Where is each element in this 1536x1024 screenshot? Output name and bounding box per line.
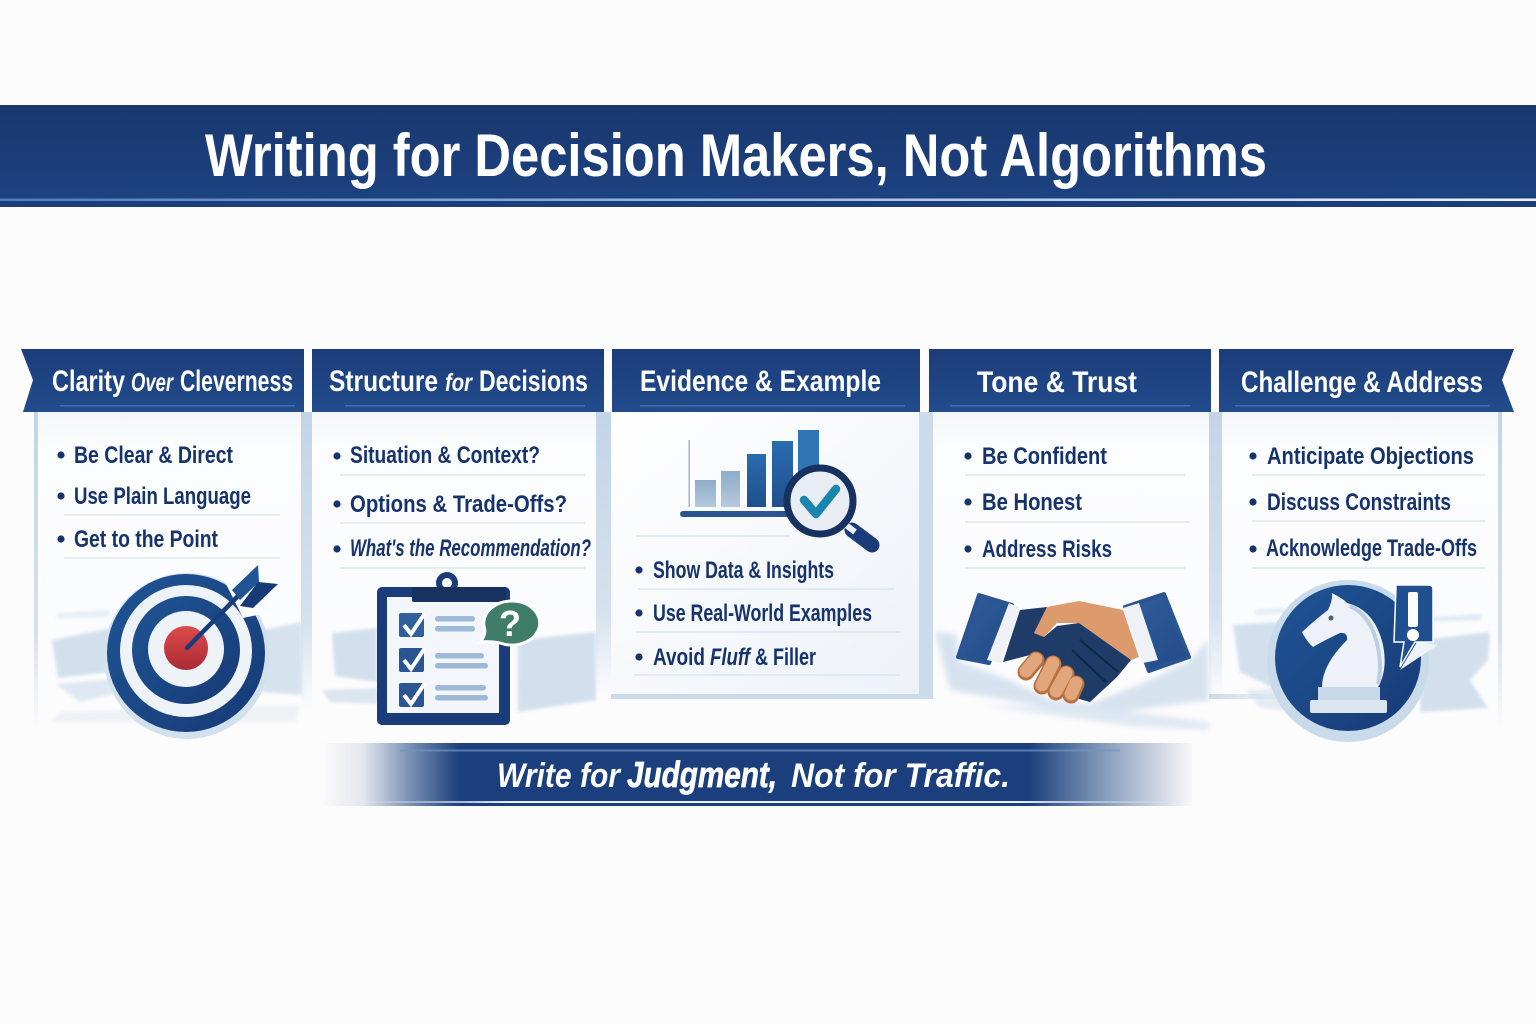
title: Writing for Decision Makers, Not Algorithms bbox=[205, 122, 1267, 189]
header: tone: Tone & Trust bbox=[977, 366, 1137, 399]
header: clarity bbox=[21, 349, 304, 412]
icon: bar chart with magnifier bbox=[680, 430, 872, 545]
watercolor wash: structure bbox=[322, 628, 596, 712]
bullets: tone: Be Confident bbox=[982, 443, 1107, 470]
panel: challenge and address bbox=[1209, 349, 1514, 742]
icon: chess knight bbox=[1267, 580, 1438, 742]
icon: clipboard checklist bbox=[377, 572, 540, 725]
bullets: tone bbox=[964, 443, 1190, 568]
bullets: evidence: & Filler bbox=[755, 644, 816, 671]
bullets: tone: Be Honest bbox=[982, 489, 1082, 516]
bullets: evidence: Use Real-World Examples bbox=[653, 600, 872, 627]
bullets: evidence: Fluff bbox=[710, 644, 752, 671]
panel: structure for decisions bbox=[312, 349, 612, 725]
panel: evidence and example bbox=[611, 349, 933, 699]
watercolor wash: challenge bbox=[1233, 608, 1490, 712]
header: clarity: Clarity bbox=[52, 365, 125, 398]
header: challenge bbox=[1219, 349, 1514, 412]
header: tone bbox=[929, 349, 1211, 412]
bullets: evidence bbox=[634, 536, 900, 675]
tagline bbox=[497, 754, 1010, 795]
panel: tone and trust bbox=[929, 349, 1222, 730]
bullets: evidence: Avoid bbox=[653, 644, 705, 671]
watercolor wash: tone bbox=[935, 632, 1209, 730]
bullets: clarity bbox=[57, 442, 280, 558]
header: evidence bbox=[612, 349, 920, 412]
footer banner bbox=[320, 743, 1195, 806]
bullets: challenge bbox=[1249, 443, 1485, 568]
bullets: structure: Options & Trade-Offs? bbox=[350, 491, 567, 518]
header: clarity: Cleverness bbox=[180, 365, 293, 398]
tagline: Judgment, bbox=[627, 754, 777, 795]
header: clarity: Over bbox=[131, 367, 174, 397]
header: challenge: Challenge & Address bbox=[1241, 366, 1483, 399]
bullets: structure: What's the Recommendation? bbox=[350, 535, 591, 562]
header: structure bbox=[312, 349, 604, 412]
tagline: Write for bbox=[497, 757, 622, 795]
panel: clarity over cleverness bbox=[21, 349, 312, 739]
bullets: structure bbox=[333, 442, 591, 568]
icon: handshake bbox=[958, 594, 1189, 702]
bullets: challenge: Anticipate Objections bbox=[1267, 443, 1474, 470]
bullets: structure: Situation & Context? bbox=[350, 442, 540, 469]
bullets: tone: Address Risks bbox=[982, 536, 1112, 563]
bullets: clarity: Use Plain Language bbox=[74, 483, 251, 510]
watercolor wash: clarity bbox=[50, 610, 302, 722]
bullets: evidence: Show Data & Insights bbox=[653, 557, 834, 584]
bullets: challenge: Discuss Constraints bbox=[1267, 489, 1451, 516]
icon: question bubble: ? bbox=[499, 603, 521, 644]
icon: target with arrow bbox=[104, 565, 278, 739]
title banner bbox=[0, 105, 1536, 207]
tagline: Not for Traffic. bbox=[791, 757, 1010, 795]
bullets: clarity: Get to the Point bbox=[74, 526, 218, 553]
icon: question bubble bbox=[480, 601, 540, 645]
header: structure: Structure bbox=[329, 365, 438, 398]
bullets: clarity: Be Clear & Direct bbox=[74, 442, 233, 469]
header: structure: for bbox=[445, 369, 473, 397]
header: evidence: Evidence & Example bbox=[640, 365, 881, 398]
icon: exclamation bubble bbox=[1394, 585, 1438, 670]
header: structure: Decisions bbox=[479, 365, 588, 398]
